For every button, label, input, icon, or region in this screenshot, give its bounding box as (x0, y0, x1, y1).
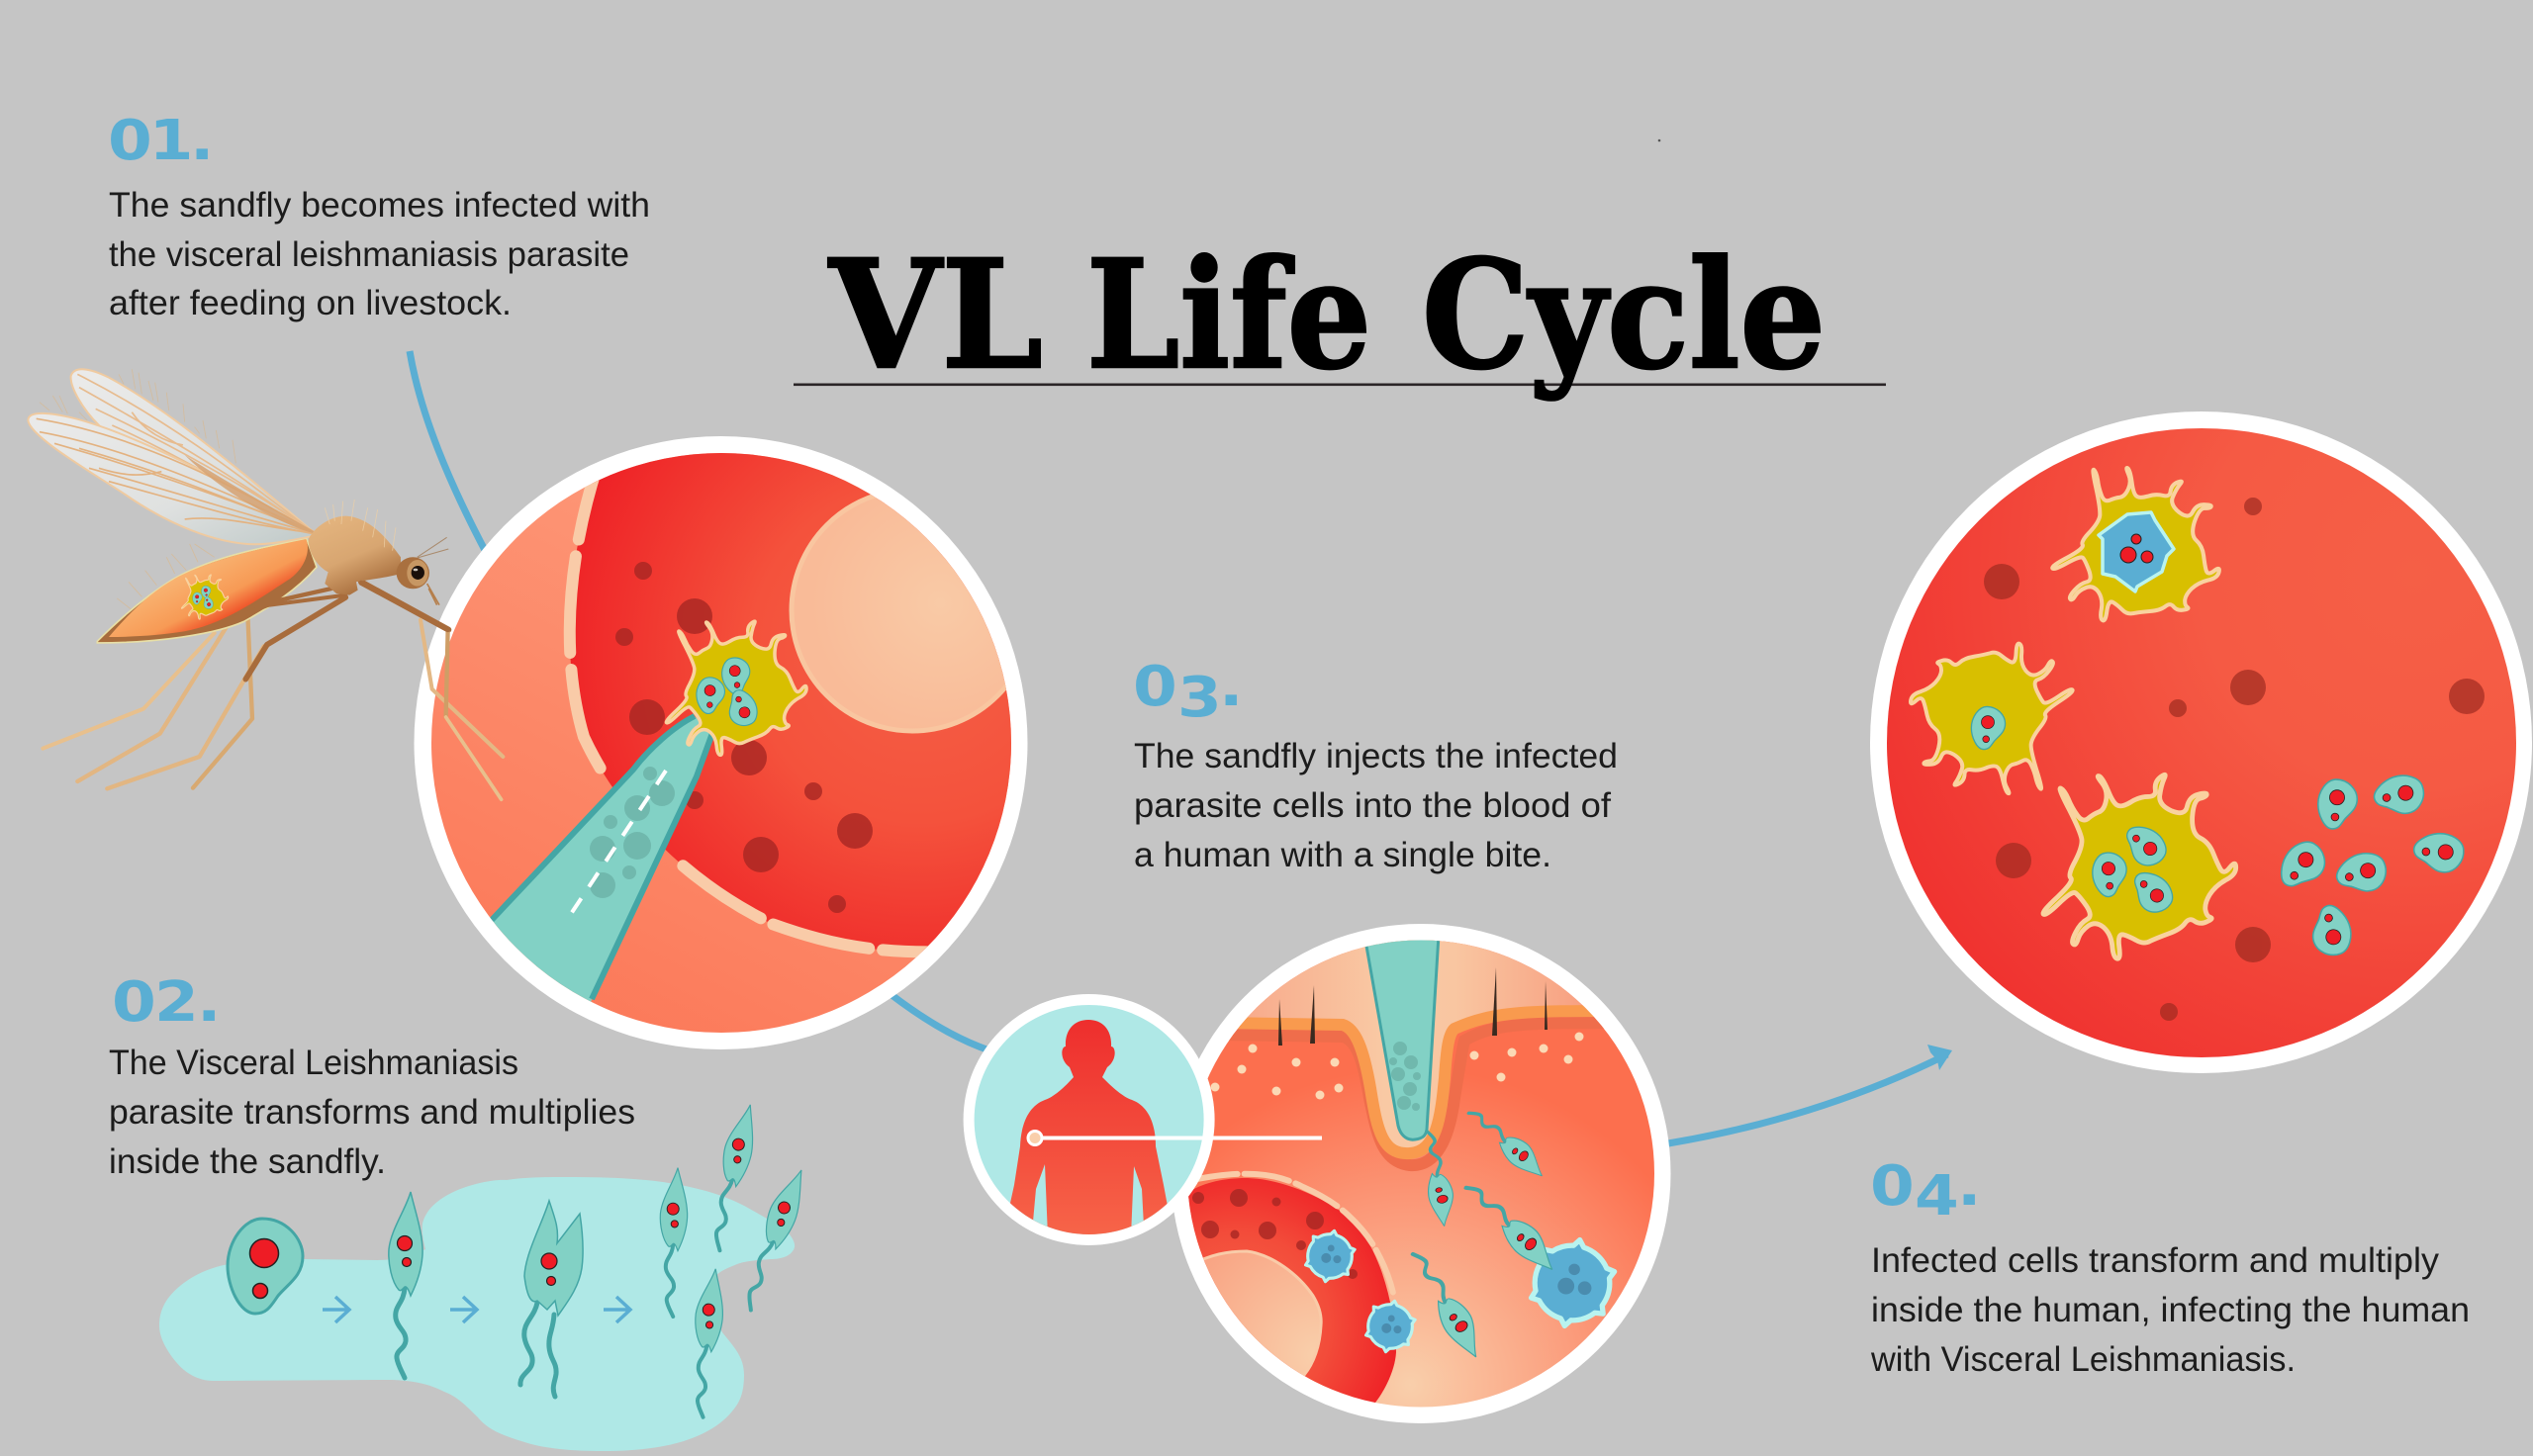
front legs (361, 583, 503, 799)
step 04 number: 04. (1870, 1154, 1981, 1228)
wing root (185, 455, 320, 535)
macrophage with three parasites (2043, 774, 2236, 958)
step 02 number: 02. (112, 970, 221, 1035)
panel: parasite transformation (159, 1102, 810, 1451)
human silhouette (1007, 1020, 1170, 1246)
vessel spots (1192, 1189, 1358, 1279)
arrow 1 (323, 1297, 349, 1322)
step 02 text (109, 1044, 635, 1181)
title underline (794, 384, 1886, 386)
proboscis granules (1389, 1042, 1421, 1111)
promastigote (389, 1192, 422, 1378)
macrophage with one parasite (1898, 627, 2079, 802)
title: Life (1086, 227, 1371, 403)
eye (412, 566, 424, 580)
femurs (231, 582, 448, 680)
step 01 text: the visceral leishmaniasis parasite (109, 235, 629, 274)
pointer marker (1028, 1132, 1042, 1145)
skin edge (1217, 1011, 1623, 1153)
abdomen hairs (117, 544, 215, 610)
pointer line (1035, 1136, 1322, 1139)
thorax hairs (325, 500, 396, 551)
multiplied parasites (660, 1102, 810, 1418)
skin shadow band (1217, 1023, 1623, 1165)
proboscis of fly (427, 584, 439, 605)
hind wing veins (77, 374, 317, 535)
step 01 text: after feeding on livestock. (109, 284, 512, 322)
title: Cycle (1422, 227, 1826, 403)
panel: human figure circle (964, 994, 1322, 1246)
blood vessel (570, 435, 1029, 955)
step 02 text: parasite transforms and multiplies (109, 1093, 635, 1132)
proboscis in skin (1364, 935, 1439, 1139)
hind legs (43, 606, 264, 788)
fore wing veins (37, 418, 320, 535)
panel: skin bite circle (1168, 924, 1672, 1424)
vessel lumen (1203, 1250, 1323, 1377)
thorax (309, 516, 401, 595)
vessel wall (1192, 1174, 1395, 1303)
proboscis dashes (567, 771, 666, 920)
speck (1658, 139, 1660, 141)
step 01 number: 01. (108, 109, 215, 173)
step 03 text: The sandfly injects the infected (1134, 737, 1618, 775)
step 03 text (1134, 737, 1618, 874)
abdomen (97, 539, 317, 643)
hind wing (71, 369, 317, 535)
title (828, 227, 1826, 403)
nucleus (790, 495, 1006, 734)
infected cell in abdomen (181, 575, 229, 619)
step 04 text (1870, 1241, 2470, 1379)
head (397, 557, 429, 589)
step 04 text: Infected cells transform and multiply (1871, 1241, 2440, 1280)
blob background (159, 1177, 795, 1451)
step 01 text: The sandfly becomes infected with (109, 186, 650, 225)
skin cells (1211, 1033, 1583, 1100)
arrow: connector from step 01 to circle (410, 351, 487, 554)
step 03 number: 03. (1133, 655, 1243, 730)
arrow: to step 04 circle (1668, 1045, 1952, 1143)
free parasites (2274, 769, 2466, 960)
amastigote (228, 1219, 303, 1314)
blood spots (615, 562, 873, 913)
fore wing (28, 413, 320, 544)
step 03 text: parasite cells into the blood of (1134, 786, 1611, 825)
vessel wall (570, 465, 950, 952)
parasites in tissue (1411, 1112, 1553, 1357)
macrophage with blue cell (2042, 455, 2239, 646)
infected macrophage (666, 621, 806, 755)
illustration: sandfly (28, 369, 503, 799)
step 04 text: with Visceral Leishmaniasis. (1870, 1340, 2296, 1379)
upper skin (1244, 940, 1587, 1147)
arrow 2 (450, 1297, 477, 1322)
proboscis granules (590, 767, 675, 898)
blue cells (1306, 1230, 1615, 1352)
dividing parasite (520, 1201, 583, 1397)
blood spots (1984, 498, 2485, 1021)
arrow: connector to human (891, 994, 989, 1050)
wing hairs (40, 369, 235, 463)
arrow 3 (604, 1297, 630, 1322)
step 01 text (109, 186, 650, 322)
hairs (1278, 967, 1548, 1046)
panel: sandfly gut circle (414, 435, 1033, 1068)
step 04 text: inside the human, infecting the human (1871, 1291, 2470, 1329)
antennae (418, 537, 448, 558)
title: VL (828, 227, 1043, 403)
panel: infected blood circle (1870, 411, 2532, 1073)
step 02 text: inside the sandfly. (109, 1142, 386, 1181)
step 02 text: The Visceral Leishmaniasis (109, 1044, 518, 1082)
proboscis (491, 716, 713, 1002)
blood vessel (1188, 1178, 1396, 1403)
step 03 text: a human with a single bite. (1134, 836, 1551, 874)
